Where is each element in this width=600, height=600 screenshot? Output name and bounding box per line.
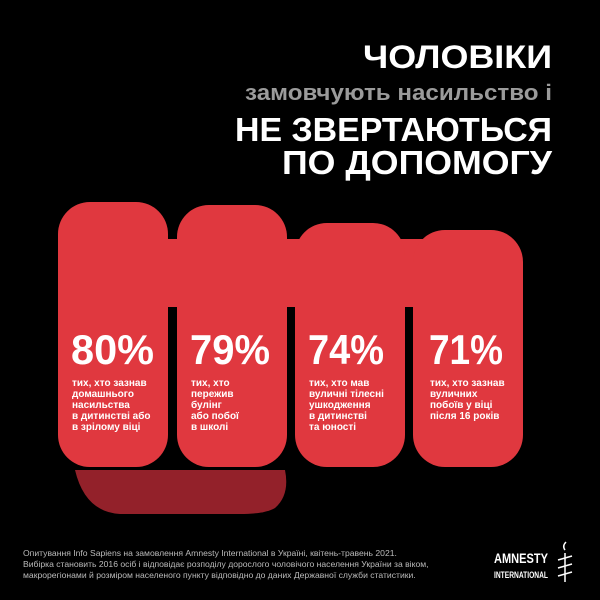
title: НЕ ЗВЕРТАЮТЬСЯ <box>235 111 552 148</box>
card 1: насильства <box>72 400 130 411</box>
card 2: 79% <box>190 326 270 373</box>
title <box>235 39 553 181</box>
card 1: 80% <box>71 326 154 373</box>
card 2: або побої <box>191 410 239 422</box>
card 4: побоїв у віці <box>430 399 493 411</box>
card 4: тих, хто зазнав <box>430 378 505 389</box>
card 3 <box>295 223 405 467</box>
card 4 <box>413 230 523 467</box>
gaps between cards <box>168 307 413 467</box>
card 1: в зрілому віці <box>72 422 141 433</box>
card 1: тих, хто зазнав <box>72 378 147 389</box>
title: замовчують насильство і <box>245 80 552 105</box>
footer note: Вибірка становить 2016 осіб і відповідає розподілу дорослого чоловічого населення України за віком, <box>23 559 429 569</box>
card 4: вуличних <box>430 389 478 400</box>
fist band <box>140 239 500 307</box>
card 2 <box>177 205 287 467</box>
fist thumb <box>75 470 286 514</box>
card 2: в школі <box>191 422 228 433</box>
card 2: пережив <box>191 389 234 400</box>
card 2: булінг <box>191 399 222 411</box>
card 2: тих, хто <box>191 378 230 389</box>
logo: amnesty <box>494 542 572 582</box>
card 4: 71% <box>429 326 503 373</box>
card 1 <box>58 202 168 467</box>
footer note: Опитування Info Sapiens на замовлення Amnesty International в Україні, квітень-травень 2021. <box>23 548 397 558</box>
card 3: та юності <box>309 422 356 433</box>
card 3: тих, хто мав <box>309 378 369 389</box>
title: ЧОЛОВІКИ <box>363 39 552 75</box>
card 3: в дитинстві <box>309 411 367 422</box>
footer note: макрорегіонами й розміром населеного пункту відповідно до даних Державної служби статистики. <box>23 570 416 580</box>
card 4: після 16 років <box>430 411 499 422</box>
logo: amnesty: AMNESTY <box>494 550 549 566</box>
card 3: ушкодження <box>309 400 371 411</box>
card 3: вуличні тілесні <box>309 389 384 400</box>
card 1: домашнього <box>72 389 134 400</box>
card 1: в дитинстві або <box>72 410 151 422</box>
logo: amnesty: INTERNATIONAL <box>494 570 548 580</box>
title: ПО ДОПОМОГУ <box>282 144 553 181</box>
card 3: 74% <box>308 326 384 373</box>
